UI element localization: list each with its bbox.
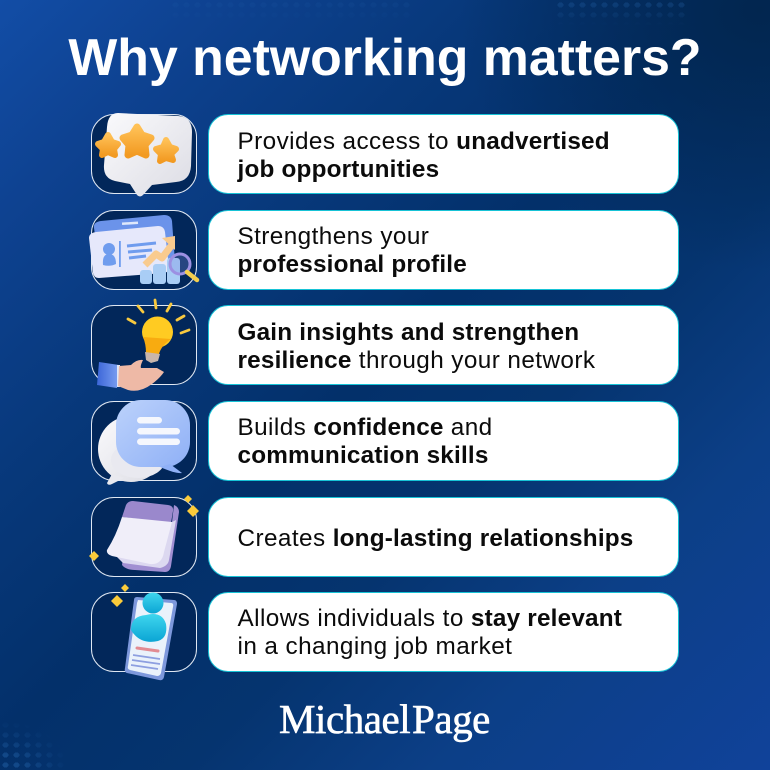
panel: stay relevant: in a changing job market <box>238 632 512 660</box>
icon: profile card with growth chart <box>89 215 197 284</box>
panel: stay relevant <box>208 592 679 672</box>
icon frame: row 5 <box>91 497 197 577</box>
panel: unadvertised job opportunities: Provides access to unadvertised <box>238 128 610 154</box>
panel: stay relevant: Allows individuals to stay relevant <box>238 604 622 632</box>
panel: insights and resilience <box>208 305 679 385</box>
panel: unadvertised job opportunities <box>208 114 679 194</box>
icon frame: row 1 <box>91 114 197 194</box>
icon: speech bubble with stars <box>98 113 192 196</box>
panel: confidence and communication: communication skills <box>238 442 489 468</box>
icon: notepad with sparkles <box>89 495 199 572</box>
logo: Michael Page: Michael Page <box>279 696 490 742</box>
icon frame: row 4 <box>91 401 197 481</box>
title: Why networking matters? <box>68 28 702 86</box>
panel: professional profile: professional profile <box>238 250 467 278</box>
icon: overlapping chat bubbles <box>98 400 190 485</box>
panel: long-lasting relationships <box>208 497 679 577</box>
icon: phone with user profile <box>111 584 177 680</box>
icon frame: row 3 <box>91 305 197 385</box>
panel: insights and resilience: Gain insights and strengthen <box>238 319 579 346</box>
panel: confidence and communication: Builds confidence and <box>238 414 493 440</box>
icon frame: row 6 <box>91 592 197 672</box>
panel: professional profile <box>208 210 679 290</box>
panel: confidence and communication <box>208 401 679 481</box>
panel: unadvertised job opportunities: job opportunities <box>238 156 439 182</box>
panel: insights and resilience: resilience through your network <box>238 347 595 374</box>
panel: long-lasting relationships: Creates long-lasting relationships <box>238 524 634 552</box>
icon: hand with light bulb <box>97 300 189 391</box>
icon frame: row 2 <box>91 210 197 290</box>
panel: professional profile: Strengthens your <box>238 222 429 250</box>
